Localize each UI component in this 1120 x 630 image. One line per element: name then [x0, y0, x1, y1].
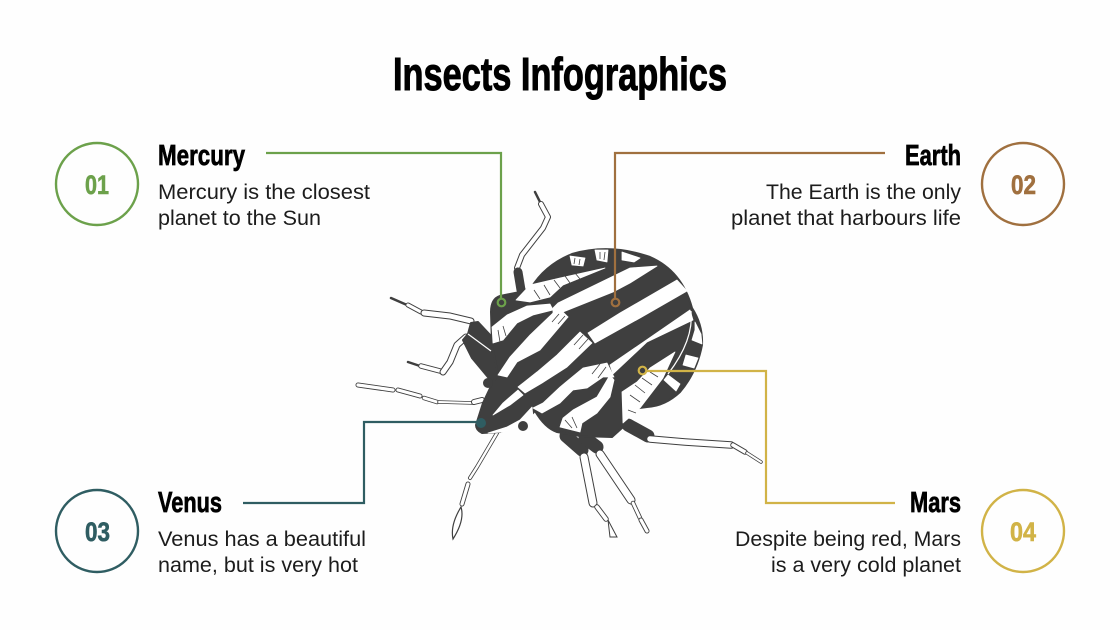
beetle body: [476, 249, 702, 437]
left middle leg: [408, 337, 466, 372]
text Earth: The Earth is the only: [766, 181, 961, 204]
text Earth: planet that harbours life: [731, 207, 961, 230]
left upper leg: [391, 298, 471, 321]
number badge 01: 01: [85, 170, 109, 200]
left antenna: [358, 385, 482, 403]
heading Mercury: Mercury: [158, 140, 245, 172]
lower antenna: [452, 433, 497, 539]
connector: Venus: [243, 418, 486, 503]
text Mercury: Mercury is the closest: [158, 181, 370, 204]
connector: Mars: [639, 367, 895, 503]
text Mercury: [158, 181, 370, 230]
title: Insects Infographics: [393, 48, 727, 100]
illustration: striped beetle: [358, 192, 761, 539]
block 04 Mars: [735, 487, 1064, 577]
text Mars: is a very cold planet: [771, 554, 961, 577]
text Mercury: planet to the Sun: [158, 207, 321, 230]
rear legs: [566, 436, 647, 537]
text Mars: Despite being red, Mars: [735, 528, 961, 551]
number badge 02: [982, 143, 1064, 225]
right hind leg: [628, 425, 761, 462]
body stripes: [488, 250, 702, 433]
heading Venus: Venus: [158, 487, 222, 519]
connector: Mercury: [266, 153, 505, 306]
upper antenna: [517, 192, 548, 290]
text Mars: [735, 528, 961, 577]
number badge 04: 04: [1010, 517, 1036, 547]
number badge 04: [982, 490, 1064, 572]
block 02 Earth: [731, 140, 1064, 230]
heading Mars: Mars: [910, 487, 961, 519]
heading Earth: Earth: [905, 140, 961, 172]
number badge 02: 02: [1011, 170, 1036, 200]
block 03 Venus: [56, 487, 366, 577]
number badge 01: [56, 143, 138, 225]
left femur block: [463, 322, 500, 382]
number badge 03: [56, 490, 138, 572]
text Venus: Venus has a beautiful: [158, 528, 366, 551]
block 01 Mercury: [56, 140, 370, 230]
connector: Earth: [612, 153, 885, 306]
head bumps: [483, 378, 528, 431]
text Venus: name, but is very hot: [158, 554, 358, 577]
text Venus: [158, 528, 366, 577]
text Earth: [731, 181, 961, 230]
number badge 03: 03: [85, 517, 110, 547]
